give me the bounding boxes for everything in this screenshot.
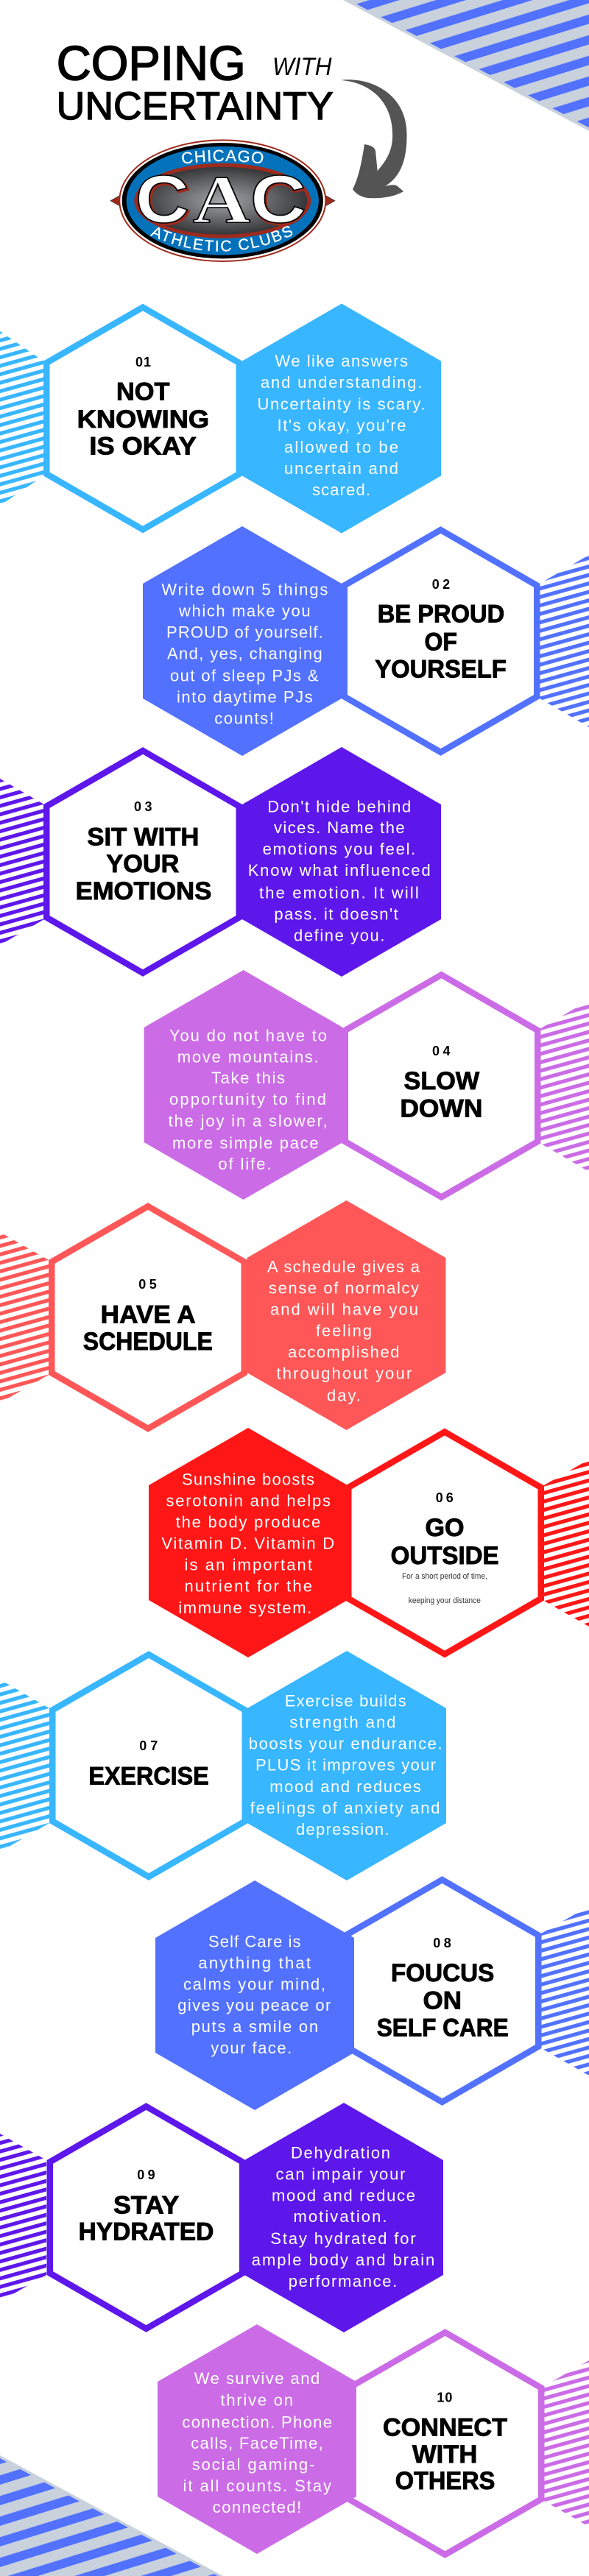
panel 10: connect with others: CONNECT [383,2413,507,2441]
panel 08: focus on self care: 08 [433,1936,451,1950]
panel 10: connect with others: 10 [437,2391,452,2405]
panel 02: be proud of yourself: PROUD of yourself. [166,623,323,642]
panel 08: focus on self care: puts a smile on [191,2017,318,2036]
panel 05: have a schedule: sense of normalcy [269,1279,419,1298]
panel 03: sit with your emotions: the emotion. It will [259,883,419,902]
logo: Chicago Athletic Clubs: CHICAGO [182,150,264,163]
panel 02: be proud of yourself: into daytime PJs [177,687,313,706]
panel 06: go outside [149,1428,589,1657]
title: UNCERTAINTY [57,85,334,128]
logo: Chicago Athletic Clubs: A [193,162,250,237]
panel 05: have a schedule: and will have you [270,1300,418,1319]
panel 06: go outside: serotonin and helps [166,1491,331,1510]
panel 09: stay hydrated: Dehydration [291,2144,390,2162]
panel 01: not knowing is okay: It's okay, you're [277,417,406,435]
panel 06: go outside: Vitamin D. Vitamin D [161,1534,334,1553]
panel 09: stay hydrated: Stay hydrated for [270,2229,416,2248]
title: WITH [272,53,332,81]
panel 06: go outside: For a short period of time, [402,1572,487,1581]
panel 04: slow down: SLOW [403,1067,480,1095]
panel 04: slow down: You do not have to [169,1026,327,1044]
panel 03: sit with your emotions: emotions you feel. [263,840,415,858]
panel 10: connect with others: OTHERS [395,2467,495,2495]
panel 06: go outside: Sunshine boosts [182,1471,314,1489]
panel 05: have a schedule: throughout your [277,1365,412,1382]
panel 04: slow down: the joy in a slower, [169,1112,328,1130]
panel 05: have a schedule: 05 [138,1277,157,1292]
panel 03: sit with your emotions: SIT WITH [87,824,199,852]
panel 05: have a schedule: day. [327,1386,361,1404]
panel 05: have a schedule: SCHEDULE [83,1328,213,1356]
panel 08: focus on self care: calms your mind, [183,1975,325,1993]
panel 08: focus on self care: SELF CARE [377,2014,509,2042]
panel 01: not knowing is okay: IS OKAY [89,433,197,461]
panel 06: go outside: immune system. [178,1599,311,1617]
panel 02: be proud of yourself: BE PROUD [378,601,504,629]
panel 04: slow down: 04 [432,1044,451,1058]
panel 09: stay hydrated: motivation. [293,2207,387,2226]
panel 10: connect with others: calls, FaceTime, [191,2434,323,2452]
panel 07: exercise: depression. [296,1820,389,1839]
panel 08: focus on self care: anything that [198,1953,311,1972]
panel 06: go outside: nutrient for the [184,1577,312,1595]
panel 03: sit with your emotions: vices. Name the [274,818,405,837]
panel 02: be proud of yourself: 02 [432,577,450,592]
panel 09: stay hydrated [0,2103,443,2332]
panel 01: not knowing is okay: 01 [135,355,151,369]
bottom-left striped corner [0,2455,223,2576]
panel 07: exercise: mood and reduces [269,1777,421,1796]
panel 03: sit with your emotions: pass. it doesn't [274,905,398,923]
panel 07: exercise: PLUS it improves your [255,1755,436,1774]
logo: Chicago Athletic Clubs: C [252,163,306,238]
panel 02: be proud of yourself: Write down 5 things [161,581,328,599]
panel 03: sit with your emotions: define you. [294,926,384,944]
panel 03: sit with your emotions [0,747,441,977]
panel 07: exercise: feelings of anxiety and [250,1799,440,1817]
panel 04: slow down: of life. [218,1155,271,1173]
panel 06: go outside: 06 [436,1490,454,1505]
panel 08: focus on self care [155,1880,589,2110]
panel 07: exercise: boosts your endurance. [249,1734,442,1752]
panel 10: connect with others: social gaming- [192,2455,315,2474]
panel 02: be proud of yourself: And, yes, changing [167,645,322,662]
logo: Chicago Athletic Clubs [110,139,336,262]
panel 01: not knowing is okay: KNOWING [77,406,209,434]
panel 08: focus on self care: ON [423,1986,462,2014]
panel 10: connect with others: connected! [213,2498,301,2516]
panel 02: be proud of yourself: which make you [178,602,311,620]
panel 09: stay hydrated: mood and reduce [272,2186,415,2204]
panel 04: slow down: Take this [211,1069,285,1087]
panel 03: sit with your emotions: EMOTIONS [76,877,211,905]
panel 02: be proud of yourself: out of sleep PJs & [170,666,319,684]
panel 04: slow down [144,970,589,1200]
panel 09: stay hydrated: can impair your [275,2165,405,2183]
panel 04: slow down: DOWN [400,1095,482,1123]
panel 01: not knowing is okay: We like answers [275,352,408,370]
panel 06: go outside: keeping your distance [409,1596,481,1605]
title: COPING [57,35,246,90]
panel 09: stay hydrated: ample body and brain [252,2251,434,2269]
panel 09: stay hydrated: performance. [289,2272,397,2290]
panel 07: exercise: EXERCISE [88,1762,209,1790]
logo: Chicago Athletic Clubs: C [250,162,306,237]
panel 07: exercise: 07 [139,1738,158,1753]
panel 04: slow down: move mountains. [177,1047,319,1066]
panel 10: connect with others: thrive on [221,2391,293,2409]
panel 04: slow down: opportunity to find [169,1090,326,1108]
panel 08: focus on self care: FOUCUS [391,1959,494,1987]
panel 01: not knowing is okay: scared. [312,481,370,499]
panel 02: be proud of yourself [143,526,589,756]
top-right striped corner [343,0,589,131]
panel 09: stay hydrated: STAY [113,2191,180,2219]
logo: Chicago Athletic Clubs: C [137,163,191,238]
panel 06: go outside: OUTSIDE [391,1542,499,1570]
panel 05: have a schedule: feeling [316,1322,372,1340]
panel 05: have a schedule [0,1200,446,1430]
panel 08: focus on self care: gives you peace or [177,1996,331,2014]
panel 10: connect with others: connection. Phone [182,2413,332,2431]
panel 06: go outside: is an important [184,1556,312,1574]
panel 03: sit with your emotions: YOUR [106,850,179,878]
panel 01: not knowing is okay: and understanding. [261,373,422,392]
panel 08: focus on self care: your face. [211,2039,292,2057]
panel 01: not knowing is okay: Uncertainty is scary. [258,394,426,413]
panel 06: go outside: the body produce [176,1513,320,1531]
panel 05: have a schedule: A schedule gives a [267,1258,420,1276]
panel 08: focus on self care: Self Care is [208,1932,300,1950]
panel 07: exercise: strength and [289,1713,395,1731]
panel 09: stay hydrated: 09 [137,2168,155,2182]
title [57,35,334,128]
panel 02: be proud of yourself: counts! [214,709,274,727]
panel 01: not knowing is okay [0,303,441,533]
panel 01: not knowing is okay: uncertain and [284,459,398,478]
arrow [341,79,407,198]
panel 07: exercise: Exercise builds [285,1691,406,1710]
panel 07: exercise [0,1651,446,1880]
logo: Chicago Athletic Clubs: ATHLETIC CLUBS [150,226,293,252]
panel 03: sit with your emotions: 03 [134,799,152,814]
panel 05: have a schedule: accomplished [288,1342,399,1362]
panel 10: connect with others [158,2324,589,2555]
panel 10: connect with others: it all counts. Stay [183,2477,331,2495]
panel 02: be proud of yourself: OF [424,629,457,657]
panel 02: be proud of yourself: YOURSELF [375,655,507,683]
panel 05: have a schedule: HAVE A [101,1301,196,1329]
panel 10: connect with others: WITH [412,2441,477,2469]
panel 06: go outside: GO [426,1514,464,1542]
panel 03: sit with your emotions: Don't hide behind [267,797,411,815]
panel 04: slow down: more simple pace [172,1133,318,1152]
panel 03: sit with your emotions: Know what influenced [248,861,431,880]
panel 09: stay hydrated: HYDRATED [79,2218,214,2246]
panel 01: not knowing is okay: allowed to be [284,438,398,456]
logo: Chicago Athletic Clubs: C [135,162,189,237]
panel 01: not knowing is okay: NOT [116,378,170,406]
panel 10: connect with others: We survive and [194,2369,320,2388]
